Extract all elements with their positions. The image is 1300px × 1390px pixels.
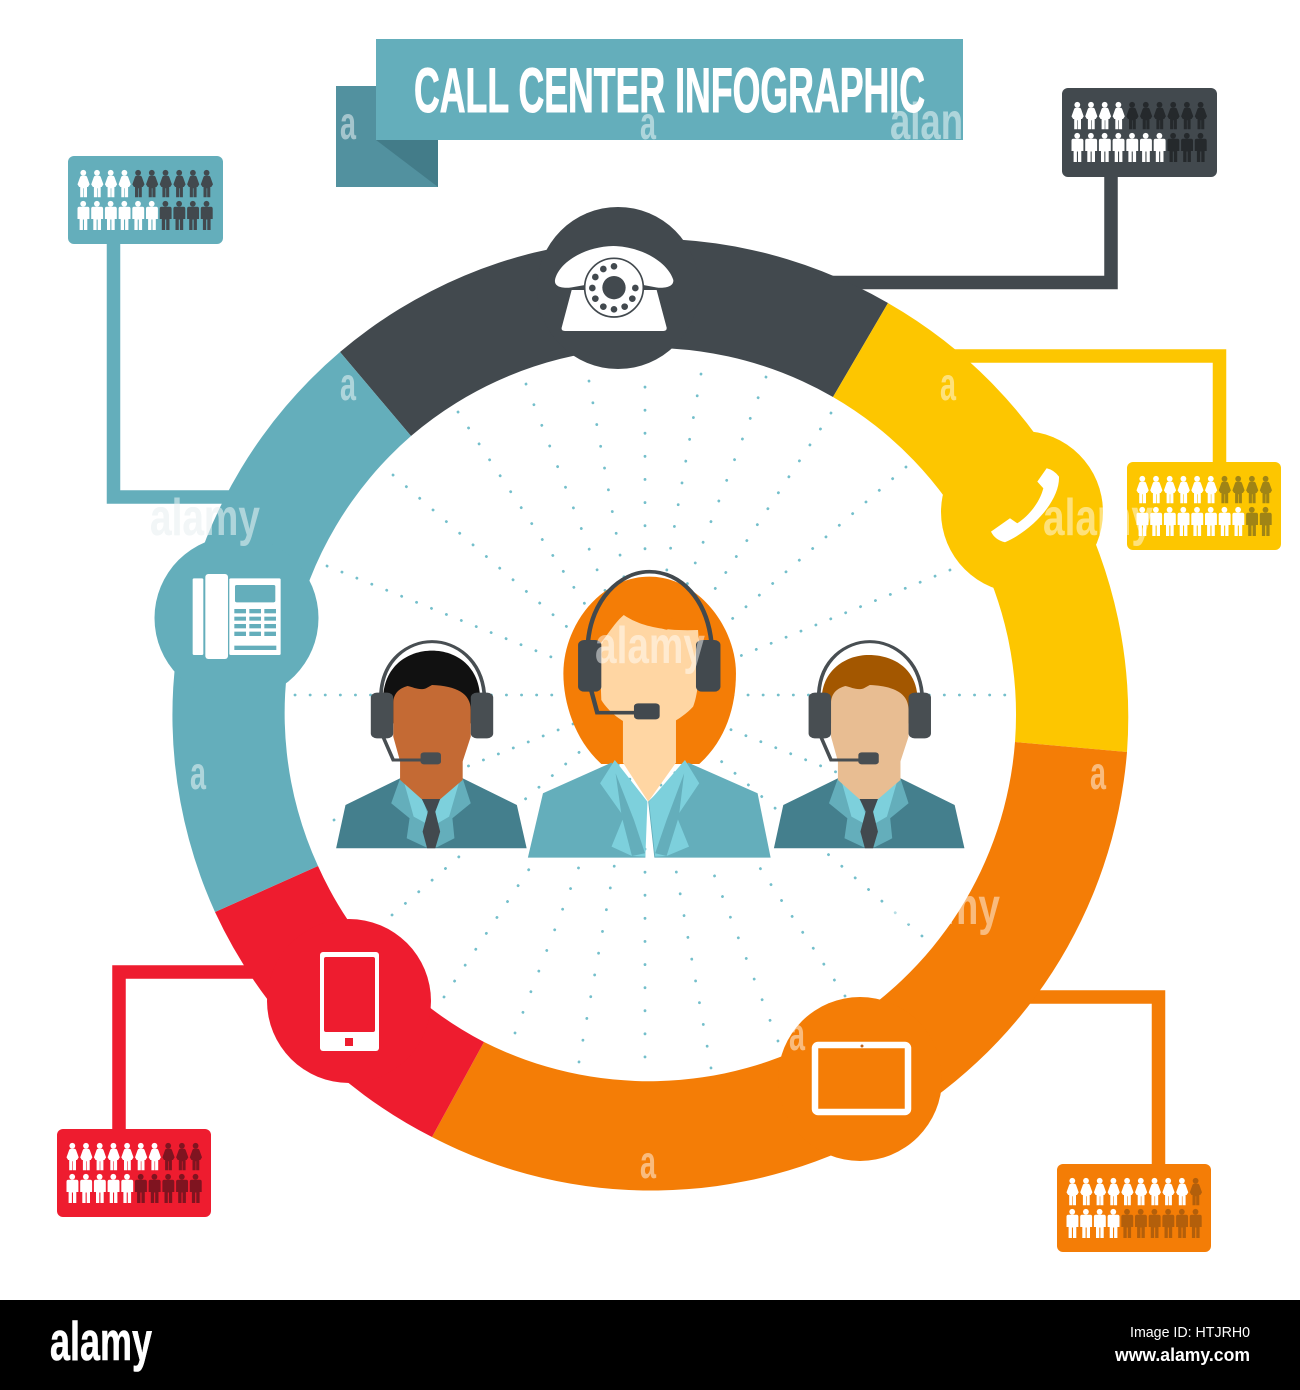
title text: CALL CENTER INFOGRAPHIC xyxy=(414,56,925,126)
icon: desk phone xyxy=(193,574,281,659)
person: centre agent xyxy=(528,572,771,858)
connector: yellow xyxy=(950,356,1220,470)
title banner xyxy=(336,39,963,187)
connector: orange xyxy=(1020,997,1158,1170)
footer image id: Image ID: HTJRH0 xyxy=(1130,1324,1250,1341)
callout: dark stats xyxy=(1062,88,1217,177)
ring segment: teal with desk phone bubble xyxy=(154,352,411,912)
person: right agent xyxy=(774,642,964,848)
watermarks: alan xyxy=(890,93,963,151)
callout: red stats xyxy=(57,1129,211,1217)
footer bar xyxy=(0,1300,1300,1390)
watermarks: a xyxy=(190,747,206,799)
watermarks: alamy xyxy=(1043,489,1153,547)
person: left agent xyxy=(336,642,527,848)
watermarks: alamy xyxy=(150,489,260,547)
dotted radial lines xyxy=(295,374,1005,1077)
icon: rotary phone xyxy=(555,246,673,331)
watermarks: alamy xyxy=(890,878,1000,936)
watermarks xyxy=(150,93,1153,1188)
faint watermark on white: alamy xyxy=(150,489,260,547)
ring segment: orange with tablet bubble xyxy=(432,742,1127,1191)
ring segment: yellow with handset bubble xyxy=(833,303,1128,752)
callout: yellow stats xyxy=(1127,462,1281,550)
callout: teal stats xyxy=(68,156,223,244)
watermarks: a xyxy=(789,1008,805,1060)
ring segment: red with smartphone bubble xyxy=(215,866,484,1137)
icon: tablet xyxy=(815,1044,908,1112)
footer logo: alamy xyxy=(50,1310,152,1372)
connector: dark xyxy=(830,170,1111,282)
callout: orange stats xyxy=(1057,1164,1211,1252)
watermarks: a xyxy=(340,97,356,149)
watermarks: a xyxy=(940,358,956,410)
footer url: www.alamy.com xyxy=(1114,1345,1250,1365)
watermarks: a xyxy=(340,358,356,410)
ring segment: dark with rotary phone bubble xyxy=(340,207,888,436)
icon: smartphone xyxy=(320,952,379,1051)
watermarks: a xyxy=(1090,747,1106,799)
connector: teal xyxy=(114,240,235,497)
watermarks: a xyxy=(640,97,656,149)
watermarks: alamy xyxy=(595,617,705,675)
connector: red xyxy=(119,972,265,1135)
icon: handset xyxy=(991,468,1059,542)
watermarks: a xyxy=(640,1136,656,1188)
